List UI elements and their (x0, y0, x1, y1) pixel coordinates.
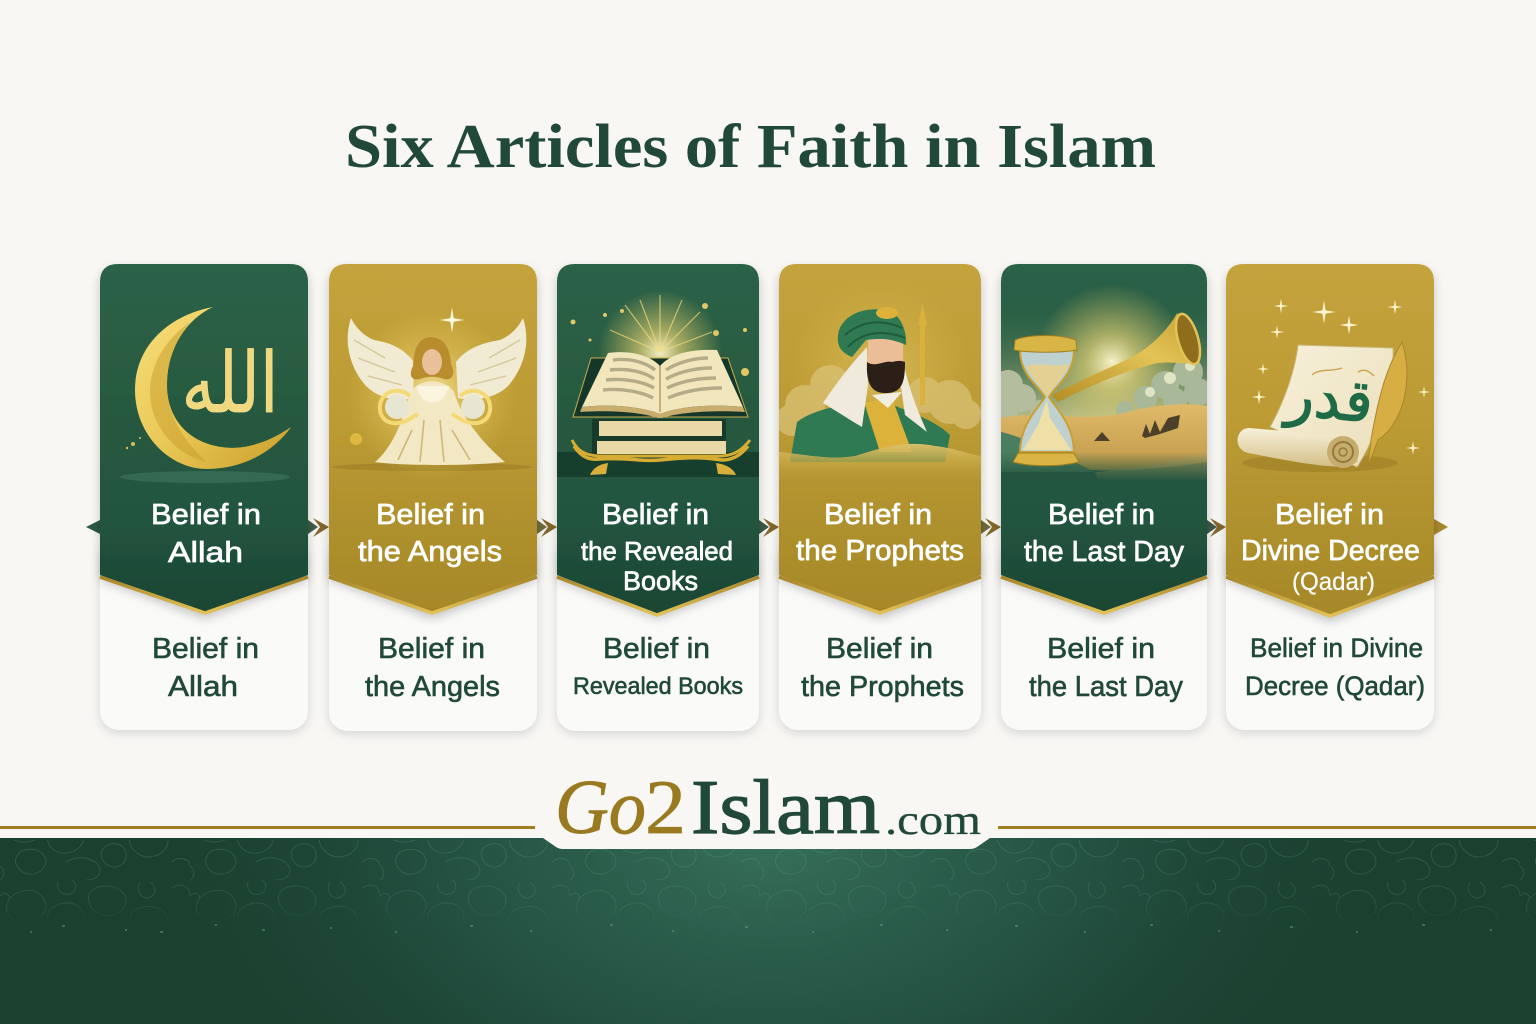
banner heading (358, 499, 502, 568)
panel: Belief in the Prophets (776, 264, 981, 730)
banner heading: Belief in (151, 499, 261, 531)
caption: Belief in (152, 633, 259, 665)
banner heading: the Revealed (581, 536, 733, 566)
banner gold edge (1001, 577, 1207, 613)
icon: scroll and quill (1238, 298, 1430, 472)
panel: Belief in the Angels (329, 264, 537, 731)
banner heading: Belief in (602, 499, 709, 531)
connector arrow: start (86, 520, 100, 534)
icon: crescent and calligraphy: الله (181, 335, 279, 432)
icon: prophet figure (779, 304, 981, 468)
logo: .com (885, 798, 981, 844)
banner (779, 264, 981, 614)
icon: crescent and calligraphy (120, 307, 291, 483)
caption: Revealed Books (573, 673, 743, 700)
banner (100, 264, 308, 614)
banner heading (151, 499, 261, 569)
caption (1245, 633, 1425, 701)
banner heading: the Last Day (1024, 536, 1184, 568)
caption (152, 633, 259, 703)
gold rule: left (0, 826, 535, 829)
caption (801, 633, 964, 703)
banner heading: Divine Decree (1241, 535, 1420, 567)
banner gold edge (779, 577, 981, 613)
banner (1001, 264, 1207, 614)
connector arrow: 3 to 4 (759, 518, 779, 537)
connector arrow: 5 to 6 (1207, 518, 1226, 537)
caption: Allah (168, 671, 238, 703)
banner heading (1241, 499, 1420, 596)
card base (1226, 540, 1434, 730)
footer band (0, 838, 1536, 1024)
icon: open book on stand (557, 290, 759, 477)
banner (329, 264, 537, 614)
icon: hourglass and horn (1001, 288, 1207, 479)
banner gold edge (1226, 577, 1434, 616)
connector arrow: 2 to 3 (537, 518, 557, 537)
logo: Islam (691, 764, 880, 850)
card base (100, 540, 308, 730)
panel: Belief in the Last Day (993, 264, 1212, 730)
caption: the Last Day (1029, 671, 1183, 703)
gold rule: right (998, 826, 1536, 829)
banner heading: the Prophets (796, 535, 964, 567)
panel: Belief in Divine Decree (1226, 264, 1434, 730)
banner heading: Belief in (824, 499, 932, 531)
banner heading (1024, 499, 1184, 568)
banner (557, 264, 759, 614)
banner heading: Allah (168, 537, 243, 569)
banner heading: (Qadar) (1292, 568, 1375, 596)
logo plate (543, 775, 990, 849)
card base (779, 540, 981, 730)
logo (555, 764, 981, 850)
banner heading: Belief in (376, 499, 485, 531)
card base (1001, 540, 1207, 730)
icon: angel (332, 308, 532, 480)
caption: Decree (Qadar) (1245, 671, 1425, 701)
caption: Belief in (826, 633, 933, 665)
banner gold edge (100, 577, 308, 613)
connector arrow: end (1434, 519, 1448, 535)
title: Six Articles of Faith in Islam (345, 113, 1156, 181)
banner heading: Books (623, 566, 698, 596)
icon: scroll and quill: قدر (1281, 359, 1377, 436)
logo: Go (555, 764, 646, 850)
banner (1226, 264, 1434, 617)
caption (365, 633, 500, 703)
panel: Belief in Allah (100, 264, 308, 730)
caption: Belief in (603, 633, 710, 665)
card base (329, 540, 537, 731)
banner heading: Belief in (1275, 499, 1384, 531)
panel: Belief in the Revealed Books (557, 264, 759, 731)
banner heading: Belief in (1048, 499, 1155, 531)
banner heading (796, 499, 964, 567)
caption: the Angels (365, 671, 500, 703)
banner gold edge (557, 577, 759, 615)
caption: the Prophets (801, 671, 964, 703)
connector arrow: 4 to 5 (981, 518, 1001, 537)
logo: 2 (645, 764, 686, 850)
caption: Belief in (378, 633, 485, 665)
caption: Belief in Divine (1250, 633, 1423, 663)
caption (573, 633, 743, 700)
card base (557, 540, 759, 731)
banner gold edge (329, 577, 537, 613)
banner heading: the Angels (358, 536, 502, 568)
caption (1029, 633, 1183, 703)
banner heading (581, 499, 733, 596)
caption: Belief in (1047, 633, 1155, 665)
connector arrow: 1 to 2 (308, 518, 329, 537)
